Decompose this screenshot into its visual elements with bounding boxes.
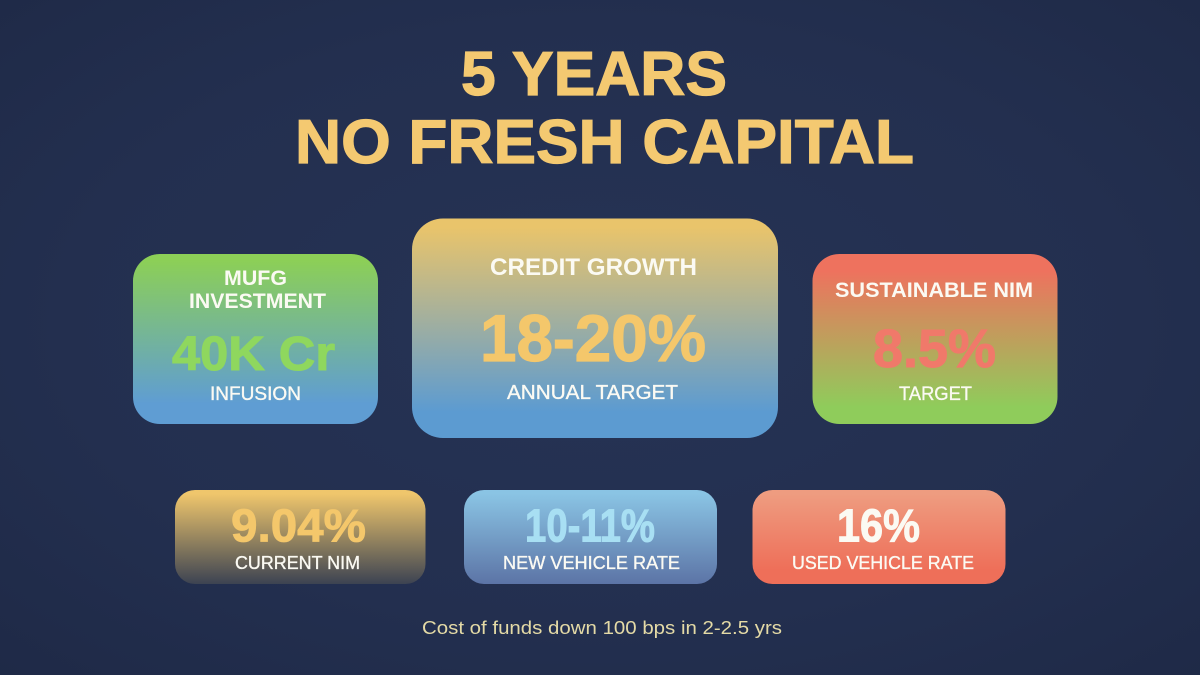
label: new vehicle rate: NEW VEHICLE RATE [503, 552, 680, 573]
label: current NIM: CURRENT NIM [235, 552, 360, 573]
panel: current NIM [175, 490, 426, 584]
label: used vehicle rate: USED VEHICLE RATE [792, 552, 974, 573]
title: 5 YEARS [461, 40, 727, 109]
panel: credit growth [412, 218, 778, 438]
panel: sustainable NIM [812, 254, 1058, 424]
panel: MUFG investment [133, 254, 378, 424]
heading: MUFG investment: MUFG [224, 267, 287, 290]
value: 10-11%: 10-11% [525, 500, 655, 552]
value: 9.04%: 9.04% [231, 500, 366, 552]
title [295, 40, 914, 177]
value: 16%: 16% [837, 500, 920, 552]
heading: MUFG investment: INVESTMENT [189, 290, 326, 313]
label: infusion: INFUSION [210, 384, 301, 405]
label: annual target: ANNUAL TARGET [507, 382, 678, 404]
heading: credit growth: CREDIT GROWTH [490, 254, 697, 281]
panel: new vehicle rate [464, 490, 717, 584]
value: 8.5%: 8.5% [873, 319, 996, 379]
value: 18-20%: 18-20% [480, 301, 706, 375]
panel: used vehicle rate [752, 490, 1006, 584]
label: target: TARGET [899, 384, 972, 405]
caption: cost of funds: Cost of funds down 100 bps in 2-2.5 yrs [422, 617, 782, 638]
title: NO FRESH CAPITAL [295, 108, 914, 177]
heading: MUFG investment [189, 267, 326, 313]
heading: sustainable NIM: SUSTAINABLE NIM [835, 279, 1033, 302]
value: 40K Cr: 40K Cr [172, 328, 335, 381]
